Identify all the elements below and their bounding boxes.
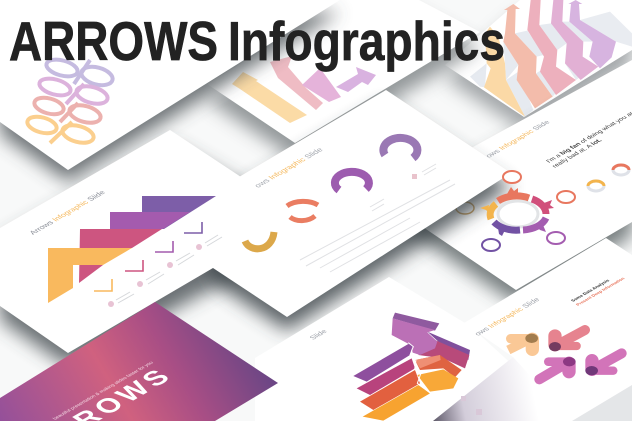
chart: orange ring bbox=[287, 201, 318, 221]
arrow: magenta right bbox=[592, 353, 622, 371]
title: ARROWS bbox=[9, 10, 218, 72]
icon: bullets bbox=[108, 244, 202, 307]
arrow: peach bbox=[508, 338, 533, 350]
chart: orange step bbox=[363, 385, 430, 421]
icon: gold small circle bbox=[456, 202, 474, 214]
caption lines bbox=[116, 235, 222, 303]
icon: label marker bbox=[412, 174, 417, 179]
arrow: magenta bbox=[539, 362, 570, 379]
slide: straight arrows, top centre bbox=[207, 0, 480, 159]
heading: ows Infographic Slide bbox=[472, 296, 542, 337]
icon: overlap circles bbox=[525, 334, 598, 375]
chart: arrow side faces bbox=[427, 332, 470, 360]
chart: arrow head top bbox=[393, 313, 439, 331]
text block: really bad at. A lot. bbox=[551, 138, 604, 169]
chart: knot row 2 bbox=[38, 76, 110, 107]
chart: segmented ring bbox=[490, 196, 546, 230]
divider between steps and faces bbox=[408, 343, 431, 393]
heading: Slide bbox=[307, 328, 329, 341]
caption lines bbox=[300, 164, 455, 272]
chart: dark purple chevron bbox=[142, 196, 216, 229]
arrow: lilac-pink stair bbox=[551, 0, 598, 80]
icon: corner marks bbox=[94, 222, 202, 291]
text block: Present Deep Information bbox=[575, 276, 626, 307]
chart: magenta ring bbox=[335, 172, 369, 190]
title: Infographics bbox=[228, 10, 505, 72]
arrow: salmon stair bbox=[503, 4, 553, 108]
slide: overlapping arrows, bottom right bbox=[433, 238, 632, 421]
chart: pink chevron bbox=[79, 229, 162, 283]
title bbox=[9, 10, 505, 72]
arrow: lilac pink bbox=[302, 68, 341, 102]
shadow under chevron slide bbox=[0, 144, 320, 367]
chart: knot row 3 bbox=[33, 95, 103, 126]
arrow: peach stair bbox=[484, 27, 525, 117]
chart: knot row 4 bbox=[26, 114, 96, 146]
icon: small donuts bbox=[588, 165, 629, 191]
slide: staggered arrow, bottom centre bbox=[255, 277, 574, 421]
slide: ring diagram, right bbox=[383, 60, 632, 304]
chart: arrow head front bbox=[392, 318, 437, 355]
arrow: red bbox=[555, 330, 585, 346]
icon: ring arrow tabs bbox=[480, 187, 554, 236]
caption: beautiful presentation & making slides faster for you bbox=[52, 360, 155, 421]
arrow: pink stair bbox=[527, 0, 576, 95]
slide: ring arrows, centre bbox=[200, 90, 511, 331]
slide: title cover, bottom left bbox=[0, 302, 278, 421]
chart: purple ring bbox=[383, 138, 417, 158]
heading: ows Infographic Slide bbox=[252, 146, 325, 189]
chart: orange chevron bbox=[48, 248, 132, 303]
slide: staircase arrows, top right bbox=[445, 0, 632, 131]
chart: pink step bbox=[357, 358, 415, 395]
arrow: pink bbox=[270, 56, 323, 110]
chart: knot row 1 bbox=[45, 57, 115, 88]
arrow: peach bbox=[232, 72, 307, 123]
slide: looped arrows, top left bbox=[0, 0, 340, 182]
chart: purple step bbox=[353, 344, 413, 382]
arrow: lilac bbox=[336, 67, 376, 92]
slide: chevrons, left bbox=[0, 130, 300, 353]
ring diagram content bbox=[480, 109, 632, 251]
arrow: lilac stair bbox=[568, 0, 616, 68]
icon: list bullets bbox=[461, 396, 482, 415]
chart: red step bbox=[360, 370, 420, 410]
heading: ows Infographic Slide bbox=[483, 119, 552, 159]
icon: small circles bbox=[482, 171, 575, 251]
heading: Arrows Infographic Slide bbox=[27, 189, 107, 236]
text block: Some Data Analysis bbox=[570, 278, 611, 303]
soft shadow area bbox=[433, 357, 572, 421]
chart: gold ring bbox=[245, 232, 274, 249]
chart: purple chevron bbox=[110, 212, 190, 247]
